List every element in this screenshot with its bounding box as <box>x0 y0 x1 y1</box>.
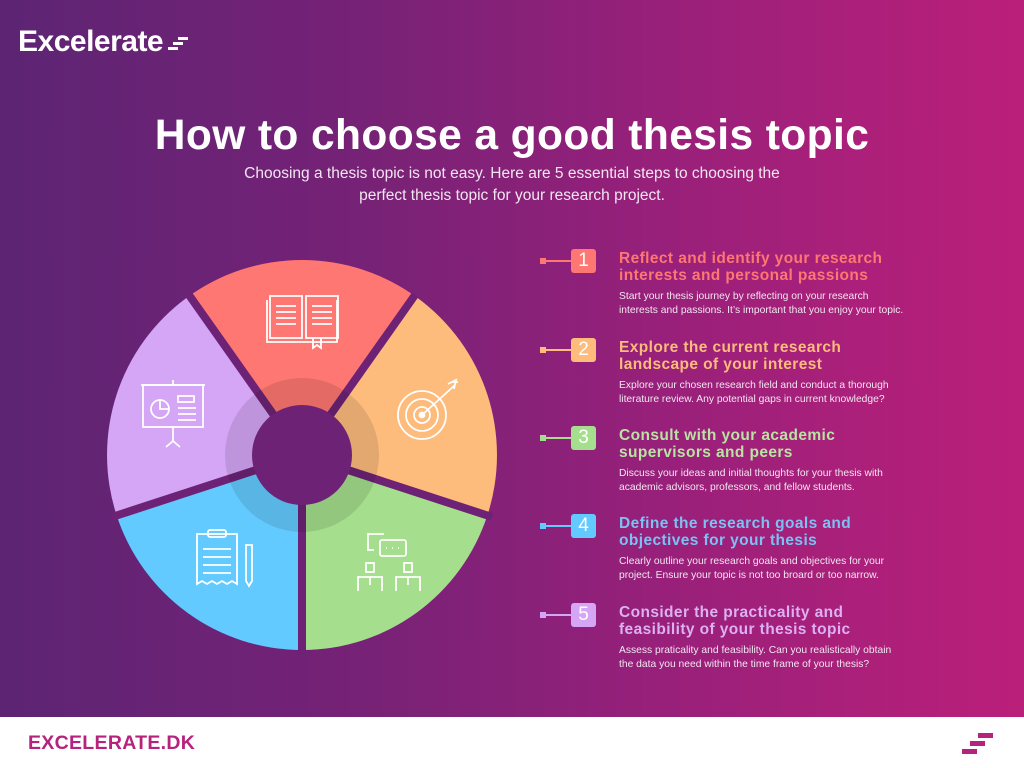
step 3: supervisors and peers <box>619 444 793 461</box>
subtitle <box>244 165 780 204</box>
subtitle: Choosing a thesis topic is not easy. Here are 5 essential steps to choosing the <box>244 165 780 182</box>
step 3: 3 <box>578 427 589 448</box>
step 1: interests and personal passions <box>619 267 868 284</box>
sector: green <box>302 455 487 650</box>
step 4: Define the research goals and <box>619 515 851 532</box>
step 2: landscape of your interest <box>619 356 822 373</box>
step 4: objectives for your thesis <box>619 532 817 549</box>
footer <box>0 717 1024 768</box>
sector: blue <box>117 455 302 650</box>
step 5: the data you need within the time frame of your thesis? <box>619 659 869 670</box>
step 3: academic advisors, professors, and fellow students. <box>619 482 855 493</box>
footer text: EXCELERATE.DK <box>28 732 195 754</box>
step 1 <box>540 249 903 316</box>
step 1: Start your thesis journey by reflecting on your research <box>619 291 869 302</box>
step 5: 5 <box>578 604 589 625</box>
sector: red <box>187 260 417 455</box>
icon: presentation <box>141 380 205 447</box>
step 2: Explore the current research <box>619 339 841 356</box>
step 5 <box>540 603 891 670</box>
logo: Excelerate: Excelerate <box>18 25 163 58</box>
step 5: feasibility of your thesis topic <box>619 621 851 638</box>
step 4 <box>540 514 884 581</box>
subtitle: perfect thesis topic for your research project. <box>359 187 665 204</box>
step 4: Clearly outline your research goals and objectives for your <box>619 556 884 567</box>
step 2 <box>540 338 889 405</box>
step 1: 1 <box>578 250 589 271</box>
icon: clipboard <box>197 530 252 586</box>
sector: purple <box>107 297 302 515</box>
footer logo <box>962 733 993 754</box>
step 4: project. Ensure your topic is not too broard or too narrow. <box>619 570 879 581</box>
title: How to choose a good thesis topic <box>155 112 869 159</box>
step 2: literature review. Any potential gaps in current knowledge? <box>619 394 885 405</box>
step 5: Assess praticality and feasibility. Can you realistically obtain <box>619 645 891 656</box>
step 3: Consult with your academic <box>619 427 835 444</box>
step 1: Reflect and identify your research <box>619 250 882 267</box>
step 3 <box>540 426 883 493</box>
wheel chart <box>107 260 497 650</box>
step 5: Consider the practicality and <box>619 604 843 621</box>
step 2: Explore your chosen research field and conduct a thorough <box>619 380 889 391</box>
step 1: interests and passions. It’s important that you enjoy your topic. <box>619 305 903 316</box>
icon: people discussing <box>358 534 420 591</box>
step 3: Discuss your ideas and initial thoughts for your thesis with <box>619 468 883 479</box>
icon: book <box>267 296 338 348</box>
icon: target <box>398 380 458 439</box>
step 2: 2 <box>578 339 589 360</box>
step 4: 4 <box>578 515 589 536</box>
sector: orange <box>302 297 497 515</box>
